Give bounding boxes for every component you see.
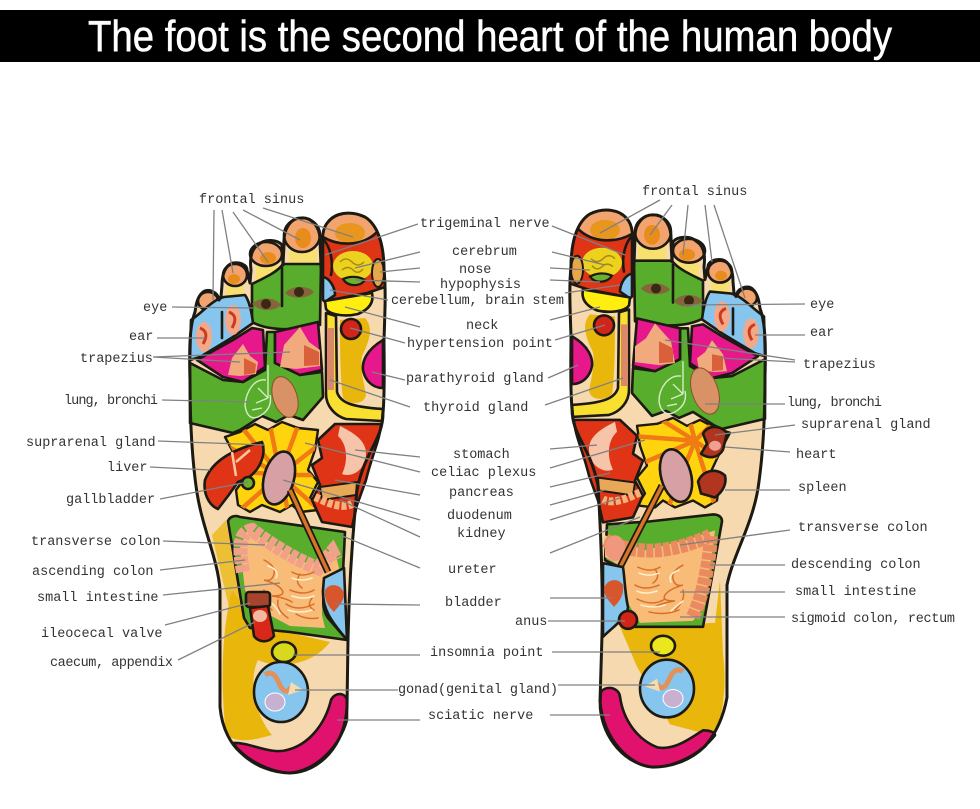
right thyroid band [572, 309, 629, 417]
left gallbladder [242, 477, 254, 489]
left cerebellum blue patch [323, 277, 335, 302]
right cerebellum [590, 273, 612, 282]
right foot labels: lung, bronchi [787, 396, 882, 411]
left pancreas [320, 482, 357, 500]
left colon lumps [240, 530, 336, 572]
right brain [582, 248, 622, 278]
right foot labels: eye [810, 298, 834, 313]
title banner [0, 10, 980, 62]
right lung zone [632, 328, 765, 429]
center labels: stomach [453, 448, 510, 463]
left thyroid band [326, 313, 383, 421]
center labels: hypophysis [440, 278, 521, 293]
right hypertension point [594, 315, 614, 335]
center labels: nose [459, 263, 491, 278]
right small toe tips [635, 215, 757, 306]
left foot labels: suprarenal gland [26, 436, 156, 451]
left foot labels: lung, bronchi [64, 394, 158, 409]
left foot labels: ascending colon [32, 565, 154, 580]
left hypertension point [341, 319, 361, 339]
right label leader lines [600, 200, 805, 617]
left insomnia point [272, 642, 296, 662]
left duodenum [315, 497, 352, 506]
left ear A [196, 322, 212, 352]
left brain [333, 251, 373, 281]
right foot labels: trapezius [803, 358, 876, 373]
right trapezius B [633, 318, 680, 371]
right ear slot [732, 308, 734, 334]
center labels: ureter [448, 563, 497, 578]
left toe stems [226, 250, 317, 297]
right foot labels: sigmoid colon, rectum [791, 612, 955, 627]
center labels: kidney [457, 527, 506, 542]
left ileocecal valve [246, 592, 270, 607]
left foot labels: frontal sinus [199, 193, 304, 208]
left kidney [258, 448, 300, 508]
left intestine highlights [268, 566, 314, 614]
right foot labels: spleen [798, 481, 847, 496]
left foot outline [190, 213, 385, 773]
right solar plexus [637, 418, 730, 507]
right foot sole base [570, 210, 765, 767]
right spine strip [621, 324, 628, 386]
right anus [619, 611, 637, 629]
left parathyroid yellow zone [340, 318, 370, 403]
right eye A [674, 295, 703, 307]
left intestine folds [263, 560, 318, 618]
left foot sole base [190, 213, 385, 773]
right hypophysis and nose [571, 256, 583, 284]
center labels: thyroid gland [423, 401, 528, 416]
center labels: cerebellum, brain stem [391, 294, 564, 309]
center-to-left leader lines [283, 224, 420, 720]
right intestine folds [635, 565, 684, 614]
left eye zone [252, 264, 321, 329]
right parathyroid gland [572, 336, 592, 384]
left sciatic nerve zone [233, 694, 347, 773]
right colon end [605, 535, 625, 561]
right colon lumps [605, 535, 711, 617]
left foot labels [26, 193, 304, 671]
right spleen [698, 471, 726, 497]
right lung organ [685, 364, 725, 418]
right bladder zone [603, 563, 628, 637]
left foot reflexology map [190, 213, 385, 773]
right trapezius A [690, 324, 758, 378]
center labels: pancreas [449, 486, 514, 501]
right foot labels: small intestine [795, 585, 917, 600]
center labels: insomnia point [430, 646, 543, 661]
left label leader lines [150, 208, 353, 660]
center labels: anus [515, 615, 547, 630]
left ear slot [221, 312, 223, 338]
center labels [391, 217, 564, 724]
right foot labels: descending colon [791, 558, 921, 573]
left trapezius B [275, 322, 322, 375]
right eye zone [634, 261, 703, 325]
right foot outline [570, 210, 765, 767]
right toe slot [672, 265, 674, 302]
left ear B [225, 305, 241, 335]
left foot labels: liver [107, 461, 148, 476]
right stomach [589, 422, 617, 471]
center labels: sciatic nerve [428, 709, 533, 724]
left big toe tip [323, 215, 377, 244]
right torso B [635, 323, 675, 365]
right colon zone [605, 514, 722, 627]
right toe stems [638, 247, 729, 294]
right duodenum [603, 493, 640, 501]
left solar plexus [225, 422, 318, 512]
left intestines [240, 528, 340, 628]
left lung zone [190, 332, 323, 433]
right big toe tip [578, 212, 632, 240]
right solar rays [638, 420, 718, 506]
left parathyroid gland [363, 340, 383, 388]
right parathyroid yellow zone [585, 314, 615, 399]
left lung organ [267, 373, 303, 421]
right ureter [620, 486, 662, 567]
left ureter [290, 490, 328, 572]
left liver [205, 442, 263, 509]
right foot labels: suprarenal gland [801, 418, 931, 433]
left toe slot [281, 268, 283, 306]
left head zone [323, 232, 385, 300]
center labels: celiac plexus [431, 466, 536, 481]
left caecum and appendix [250, 606, 274, 641]
right bladder organ [604, 580, 623, 607]
right ear A [743, 318, 759, 348]
left eye B [285, 287, 314, 298]
left foot labels: ear [129, 330, 153, 345]
right foot reflexology map [570, 210, 765, 767]
right torso A [697, 340, 727, 372]
left stomach zone [312, 424, 381, 527]
left cerebellum [343, 277, 365, 285]
left eye A [252, 298, 281, 310]
right foot labels: transverse colon [798, 521, 928, 536]
right sciatic nerve zone [600, 688, 715, 767]
left lateral yellow shading [212, 520, 240, 620]
right ear zone [702, 292, 765, 356]
left neck [325, 293, 372, 315]
left trapezius A [197, 328, 265, 382]
left hypophysis and nose [372, 259, 384, 287]
right foot labels: frontal sinus [642, 185, 747, 200]
left stomach [338, 426, 366, 475]
center-to-right leader lines [545, 226, 660, 715]
center labels: hypertension point [407, 337, 553, 352]
center labels: parathyroid gland [406, 372, 544, 387]
left bladder zone [323, 568, 347, 640]
center labels: neck [466, 319, 498, 334]
right head zone [570, 229, 632, 296]
right intestines [605, 530, 715, 623]
left foot labels: gallbladder [66, 493, 155, 508]
left lung lobe [245, 365, 270, 418]
center labels: duodenum [447, 509, 512, 524]
left heel yellow shading [223, 590, 330, 740]
left foot labels: transverse colon [31, 535, 161, 550]
right ear B [714, 301, 730, 331]
right heel yellow shading [620, 580, 725, 736]
right neck [583, 290, 630, 312]
right eye B [641, 283, 670, 294]
right lung lobe [659, 361, 686, 414]
center labels: cerebrum [452, 245, 517, 260]
left torso B [280, 327, 320, 369]
left bladder organ [325, 585, 344, 612]
center labels: trigeminal nerve [420, 217, 550, 232]
left foot labels: eye [143, 301, 167, 316]
left torso A [228, 344, 258, 376]
left foot labels: caecum, appendix [50, 656, 173, 671]
left colon zone [228, 516, 347, 640]
right heart [701, 427, 727, 457]
left gonad [254, 662, 308, 722]
right foot labels [642, 185, 955, 627]
right cerebellum blue patch [620, 274, 632, 298]
center labels: bladder [445, 596, 502, 611]
right insomnia point [651, 636, 675, 656]
left ear zone [190, 295, 253, 360]
left foot labels: ileocecal valve [41, 627, 163, 642]
left spine strip [327, 328, 334, 390]
right stomach zone [574, 420, 643, 522]
right foot labels: ear [810, 326, 834, 341]
center labels: gonad(genital gland) [398, 683, 558, 698]
right intestine highlights [637, 570, 683, 611]
left foot labels: trapezius [80, 352, 153, 367]
left solar rays [229, 426, 316, 509]
right kidney [655, 446, 697, 505]
left small toe tips [198, 218, 320, 310]
right pancreas [598, 478, 635, 496]
right foot labels: heart [796, 448, 837, 463]
left foot labels: small intestine [37, 591, 159, 606]
right gonad [640, 660, 694, 717]
